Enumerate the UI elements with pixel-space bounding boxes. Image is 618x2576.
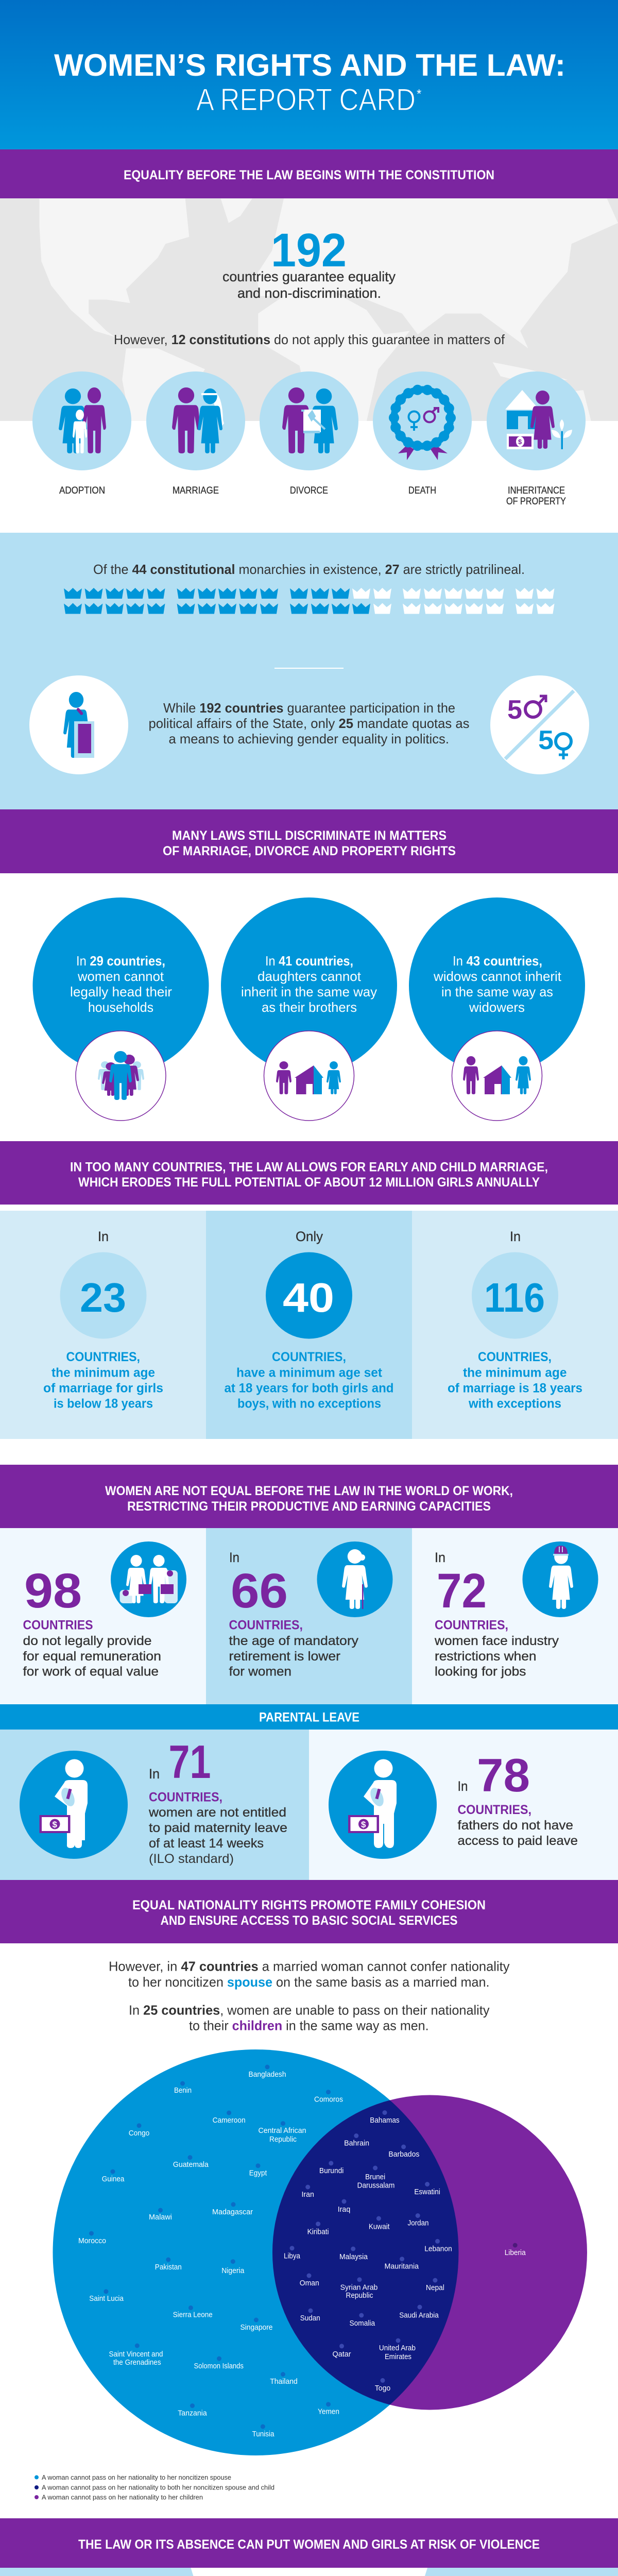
panel: 23 countries: 23: [80, 1275, 126, 1320]
panel: 23 countries: [0, 1211, 206, 1439]
venn labels: spouse and children: Kiribati: [307, 2227, 329, 2236]
venn labels: spouse and children: Oman: [300, 2279, 319, 2287]
venn labels: spouse only: Guatemala: [173, 2160, 209, 2169]
venn labels: spouse only: Cameroon: [213, 2116, 246, 2125]
venn labels: spouse only: Saint Vincent and: [109, 2350, 163, 2359]
venn labels: spouse only: Tunisia: [252, 2430, 274, 2438]
venn labels: spouse and children: United Arab: [379, 2344, 416, 2352]
stat: 192 countries: [222, 224, 396, 301]
venn labels: spouse only: the Grenadines: [113, 2358, 161, 2367]
venn labels: spouse only: Morocco: [78, 2236, 106, 2245]
venn diagram: [53, 2049, 587, 2455]
venn labels: spouse only: Madagascar: [212, 2208, 253, 2216]
panel: 78 countries paternity leave: 78: [477, 1750, 530, 1802]
venn dots: spouse and children: [289, 2110, 440, 2383]
subtitle asterisk: *: [417, 87, 421, 101]
label: adoption: ADOPTION: [59, 485, 105, 496]
venn labels: spouse only: Benin: [174, 2086, 192, 2095]
venn labels: spouse and children: Barbados: [388, 2150, 419, 2159]
panel: 66 countries: 66: [231, 1564, 288, 1618]
text: nationality intro: In 25 countries, women are unable to pass on their nationality: [129, 2002, 489, 2018]
venn labels: spouse only: Sierra Leone: [173, 2311, 213, 2319]
panel: 40 countries: have a minimum age set: [236, 1366, 383, 1380]
panel: 72 countries: In: [435, 1550, 445, 1565]
panel: 116 countries: of marriage is 18 years: [448, 1381, 582, 1396]
venn labels: spouse and children: Nepal: [426, 2283, 444, 2292]
label: inheritance of property: [506, 485, 566, 507]
panel: 72 countries: looking for jobs: [435, 1665, 526, 1679]
panel: 40 countries: boys, with no exceptions: [237, 1397, 381, 1411]
venn labels: spouse only: Republic: [269, 2135, 297, 2144]
icon: father with baby and money: $: [361, 1820, 366, 1829]
icon: marriage: [146, 371, 245, 470]
panel: rape exemption: [0, 2568, 216, 2576]
panel: 78 countries paternity leave: COUNTRIES,: [457, 1803, 531, 1817]
venn labels: spouse and children: Qatar: [333, 2350, 351, 2359]
panel: head of household: women cannot: [77, 969, 164, 984]
crown pictogram: 27 of 44 blue: [64, 588, 554, 614]
venn labels: spouse and children: Republic: [346, 2291, 373, 2300]
panel: widows: widowers: [469, 999, 525, 1015]
panel: 71 countries maternity leave: 71: [169, 1736, 211, 1788]
icon: 50/50: [490, 675, 589, 774]
panel: monarchies and quotas: [0, 533, 618, 809]
panel: head of household: In 29 countries,: [76, 953, 165, 969]
panel: 66 countries: COUNTRIES,: [229, 1618, 303, 1632]
section heading: violence: [0, 2518, 618, 2568]
venn labels: spouse only: Yemen: [318, 2408, 339, 2416]
text: nationality intro: [109, 1959, 510, 2033]
venn labels: spouse and children: Darussalam: [357, 2181, 394, 2190]
panel: 66 countries: the age of mandatory: [229, 1634, 359, 1648]
panel: 78 countries paternity leave: [309, 1730, 618, 1880]
panel: 116 countries: 116: [484, 1275, 545, 1320]
venn labels: spouse only: Central African: [259, 2126, 306, 2135]
panel: 98 countries: COUNTRIES: [23, 1618, 93, 1632]
section heading: world of work: [0, 1465, 618, 1528]
venn labels: spouse and children: [284, 2116, 452, 2393]
stat: 192 countries: and non-discrimination.: [237, 285, 381, 301]
section heading: marriage, divorce, property: MANY LAWS STILL DISCRIMINATE IN MATTERS: [172, 828, 447, 843]
label: inheritance of property: OF PROPERTY: [506, 496, 566, 507]
panel: 40 countries: [206, 1211, 412, 1439]
venn labels: spouse and children: Saudi Arabia: [399, 2311, 439, 2319]
icon: mother with baby and money: $: [53, 1820, 58, 1829]
panel: daughters: daughters cannot: [258, 969, 362, 984]
venn labels: spouse and children: Jordan: [408, 2219, 428, 2228]
venn labels: spouse and children: Sudan: [300, 2314, 320, 2323]
panel: 23 countries: is below 18 years: [54, 1397, 153, 1411]
panel: 40 countries: 40: [283, 1275, 334, 1320]
stat: 192 countries: countries guarantee equality: [222, 269, 396, 284]
venn labels: spouse and children: Lebanon: [424, 2244, 452, 2253]
panel: 98 countries: 98: [24, 1564, 82, 1618]
section heading: nationality: [0, 1880, 618, 1943]
icon: older woman: [317, 1541, 392, 1617]
venn legend: A woman cannot pass on her nationality to both her noncitizen spouse and child: [42, 2484, 274, 2492]
panel: widows: In 43 countries,: [453, 953, 542, 969]
panel: 66 countries: In: [229, 1550, 239, 1565]
panel: 78 countries paternity leave: In: [457, 1778, 468, 1794]
panel: 40 countries: COUNTRIES,: [272, 1350, 346, 1364]
venn labels: spouse only: Nigeria: [221, 2266, 245, 2275]
panel: head of household: legally head their: [70, 984, 172, 999]
venn labels: spouse only: Thailand: [270, 2377, 298, 2386]
panel: 98 countries: do not legally provide: [23, 1634, 151, 1648]
venn labels: spouse and children: Syrian Arab: [340, 2283, 377, 2292]
venn labels: spouse and children: Togo: [375, 2384, 390, 2393]
header banner: [0, 0, 618, 149]
panel: 116 countries: In: [510, 1229, 521, 1244]
section heading: marriage, divorce, property: OF MARRIAGE, DIVORCE AND PROPERTY RIGHTS: [163, 844, 456, 858]
icon: woman in hard hat: [522, 1541, 598, 1617]
panel: domestic violence: [402, 2568, 618, 2576]
section heading: child marriage: IN TOO MANY COUNTRIES, THE LAW ALLOWS FOR EARLY AND CHILD MARRIAGE,: [70, 1160, 548, 1175]
panel: daughters: as their brothers: [262, 999, 357, 1015]
icon: household group: [76, 1031, 166, 1121]
icon: father with baby and money: [329, 1751, 437, 1859]
panel: 23 countries: COUNTRIES,: [66, 1350, 140, 1364]
icon: adoption: [32, 371, 131, 470]
panel: widows: widows cannot inherit: [433, 969, 562, 984]
venn labels: spouse only: Solomon Islands: [194, 2362, 244, 2370]
section heading: child marriage: WHICH ERODES THE FULL POTENTIAL OF ABOUT 12 MILLION GIRLS ANNUALLY: [78, 1175, 540, 1190]
panel: 98 countries: for work of equal value: [23, 1665, 159, 1679]
venn labels: spouse only: Malawi: [149, 2213, 172, 2222]
section heading: nationality: AND ENSURE ACCESS TO BASIC SOCIAL SERVICES: [161, 1913, 457, 1928]
icon: equal pay: [111, 1541, 186, 1617]
venn labels: spouse and children: Somalia: [349, 2319, 375, 2328]
label: marriage: MARRIAGE: [173, 485, 219, 496]
panel: 23 countries: of marriage for girls: [43, 1381, 163, 1396]
label: inheritance of property: INHERITANCE: [508, 485, 565, 496]
section heading: world of work: RESTRICTING THEIR PRODUCTIVE AND EARNING CAPACITIES: [127, 1499, 491, 1514]
panel: widows: in the same way as: [441, 984, 553, 999]
icon: death: [373, 371, 472, 470]
panel: 71 countries maternity leave: [0, 1730, 309, 1880]
world map background: [0, 198, 618, 421]
label: death: DEATH: [408, 485, 436, 496]
section heading: marriage, divorce, property: [0, 809, 618, 873]
title: WOMEN’S RIGHTS AND THE LAW:: [54, 48, 565, 82]
panel: 116 countries: [412, 1211, 618, 1439]
icon: woman at podium: [29, 675, 128, 774]
section heading: child marriage: [0, 1141, 618, 1205]
panel: daughters: inherit in the same way: [241, 984, 377, 999]
panel: 72 countries: 72: [437, 1564, 487, 1618]
label: divorce: DIVORCE: [290, 485, 328, 496]
panel: 78 countries paternity leave: access to paid leave: [457, 1834, 578, 1848]
venn labels: spouse and children: Bahamas: [370, 2116, 400, 2125]
venn labels: spouse and children: Malaysia: [339, 2252, 368, 2261]
icon: divorce: [260, 371, 358, 470]
venn labels: spouse only: Tanzania: [178, 2409, 207, 2417]
venn labels: spouse only: Saint Lucia: [89, 2294, 124, 2303]
venn label: children only: [505, 2243, 526, 2257]
venn labels: spouse and children: Iran: [301, 2190, 314, 2199]
text: nationality intro: to her noncitizen spouse on the same basis as a married man.: [128, 1974, 489, 1990]
venn labels: spouse only: Comoros: [314, 2095, 343, 2104]
panel: 116 countries: COUNTRIES,: [478, 1350, 552, 1364]
text: 12 constitutions: However, 12 constitutions do not apply this guarantee in matters of: [114, 332, 505, 347]
text: political participation: [148, 700, 470, 747]
panel: 40 countries: Only: [296, 1229, 323, 1244]
panel: 98 countries: [0, 1528, 206, 1704]
venn labels: spouse only: Singapore: [240, 2323, 273, 2332]
section heading: constitution: EQUALITY BEFORE THE LAW BEGINS WITH THE CONSTITUTION: [124, 168, 494, 182]
venn labels: spouse and children: Burundi: [319, 2166, 344, 2175]
panel: 116 countries: the minimum age: [463, 1366, 567, 1380]
panel: 71 countries maternity leave: women are not entitled: [148, 1805, 286, 1820]
panel: 72 countries: women face industry: [434, 1634, 559, 1648]
subheading: parental leave: [0, 1704, 618, 1730]
text: nationality intro: However, in 47 countries a married woman cannot confer nationality: [109, 1959, 510, 1974]
panel: 116 countries: with exceptions: [468, 1397, 561, 1411]
venn legend: [35, 2473, 274, 2501]
panel: 23 countries: In: [98, 1229, 109, 1244]
venn labels: spouse only: Guinea: [102, 2175, 125, 2183]
venn labels: spouse only: Bangladesh: [248, 2070, 286, 2079]
subtitle: A REPORT CARD: [196, 82, 416, 117]
venn legend: A woman cannot pass on her nationality to her noncitizen spouse: [42, 2473, 231, 2481]
icon: inheritance of property: $: [518, 438, 522, 446]
venn labels: spouse and children: Iraq: [338, 2205, 350, 2214]
venn labels: spouse and children: Mauritania: [384, 2262, 419, 2271]
stat: 192 countries: 192: [271, 224, 347, 277]
panel: 71 countries maternity leave: to paid maternity leave: [149, 1821, 287, 1835]
section heading: nationality: EQUAL NATIONALITY RIGHTS PROMOTE FAMILY COHESION: [132, 1898, 486, 1912]
venn labels: spouse and children: Bahrain: [344, 2139, 369, 2147]
panel: 72 countries: COUNTRIES,: [435, 1618, 508, 1632]
panel: widows: [409, 897, 585, 1121]
text: political participation: political affairs of the State, only 25 mandate quotas as: [148, 716, 470, 731]
panel: 71 countries maternity leave: (ILO standard): [149, 1852, 234, 1866]
text: monarchies: Of the 44 constitutional monarchies in existence, 27 are strictly patrilineal.: [93, 562, 525, 577]
panel: 66 countries: [206, 1528, 412, 1704]
icon: 50/50: 5: [507, 695, 522, 725]
section heading: constitution: [0, 149, 618, 198]
panel: 72 countries: [412, 1528, 618, 1704]
section heading: world of work: WOMEN ARE NOT EQUAL BEFORE THE LAW IN THE WORLD OF WORK,: [105, 1484, 513, 1498]
venn labels: spouse and children: Kuwait: [369, 2223, 390, 2231]
panel: 66 countries: retirement is lower: [229, 1649, 340, 1664]
icon: inheritance of property: [487, 371, 586, 470]
venn labels: spouse and children: Libya: [284, 2251, 301, 2260]
panel: 72 countries: restrictions when: [435, 1649, 537, 1664]
panel: head of household: [33, 897, 209, 1121]
icon: 50/50: 5: [538, 725, 554, 755]
panel: head of household: households: [88, 999, 153, 1015]
venn labels: spouse only: Egypt: [249, 2169, 267, 2178]
text: political participation: a means to achieving gender equality in politics.: [169, 731, 449, 747]
panel: 40 countries: at 18 years for both girls and: [225, 1381, 393, 1396]
text: nationality intro: to their children in the same way as men.: [189, 2018, 429, 2033]
icon: mother with baby and money: [20, 1751, 128, 1859]
venn labels: spouse only: Congo: [129, 2129, 149, 2138]
icon: widower, house, widow: [452, 1031, 542, 1121]
venn legend: A woman cannot pass on her nationality to her children: [42, 2494, 203, 2501]
venn labels: spouse only: Pakistan: [155, 2263, 182, 2272]
panel: daughters: [221, 897, 397, 1121]
icon: brother, house, sister: [264, 1031, 354, 1121]
section heading: violence: THE LAW OR ITS ABSENCE CAN PUT WOMEN AND GIRLS AT RISK OF VIOLENCE: [78, 2537, 540, 2552]
panel: 66 countries: for women: [229, 1665, 291, 1679]
panel: 71 countries maternity leave: of at least 14 weeks: [149, 1836, 264, 1851]
venn labels: spouse and children: Brunei: [365, 2173, 385, 2181]
text: political participation: While 192 countries guarantee participation in the: [163, 700, 455, 716]
panel: 71 countries maternity leave: In: [149, 1766, 160, 1782]
panel: 98 countries: for equal remuneration: [23, 1649, 161, 1664]
panel: 71 countries maternity leave: COUNTRIES,: [149, 1790, 222, 1804]
panel: 78 countries paternity leave: fathers do not have: [457, 1818, 573, 1833]
venn labels: spouse and children: Emirates: [385, 2352, 411, 2361]
venn dots: spouse only: [89, 2065, 331, 2429]
panel: 23 countries: the minimum age: [52, 1366, 155, 1380]
venn label: children only: Liberia: [505, 2248, 526, 2257]
panel: daughters: In 41 countries,: [265, 953, 353, 969]
venn labels: spouse and children: Eswatini: [414, 2188, 440, 2196]
venn labels: spouse only: [78, 2070, 343, 2438]
subheading: parental leave: PARENTAL LEAVE: [259, 1710, 359, 1725]
